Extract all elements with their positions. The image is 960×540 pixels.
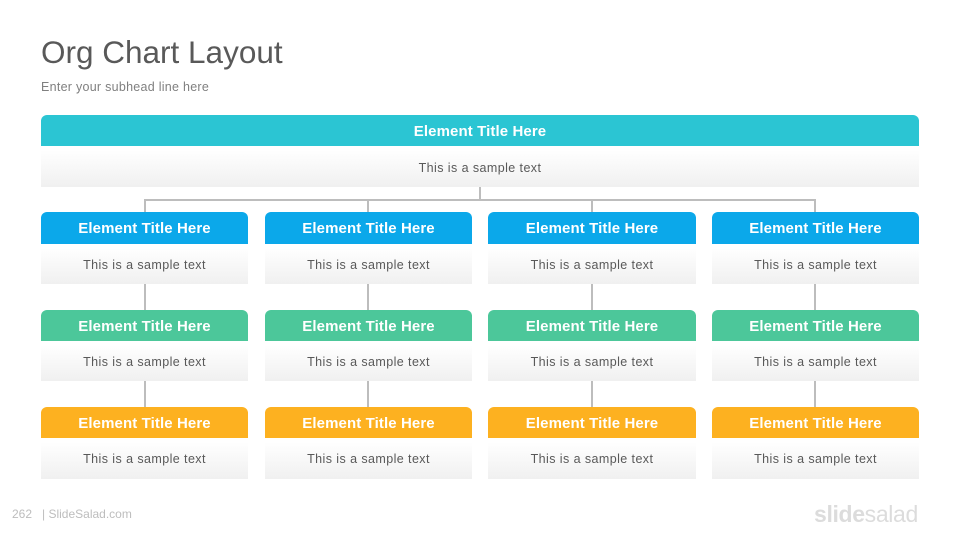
card: column 3 row 3: This is a sample text (531, 452, 653, 466)
card: column 1 row 1: This is a sample text (83, 258, 206, 272)
card: column 3 row 3: Element Title Here (526, 415, 658, 432)
card: column 4 row 1: This is a sample text (754, 258, 877, 272)
card: column 3 row 1: Element Title Here (526, 220, 658, 237)
card: column 2 row 1: This is a sample text (307, 258, 430, 272)
card: column 1 row 1: Element Title Here (78, 220, 211, 237)
card: column 1 row 1 (41, 212, 248, 284)
card: column 4 row 2: Element Title Here (749, 318, 882, 335)
card: column 2 row 2: Element Title Here (302, 318, 435, 335)
title: Org Chart Layout (41, 34, 283, 70)
logo wordmark: slidesalad (814, 501, 918, 527)
card: column 1 row 2 (41, 310, 248, 381)
card: column 4 row 3: Element Title Here (749, 415, 882, 432)
card: column 3 row 1 (488, 212, 696, 284)
footer page number: 262 | SlideSalad.com (12, 507, 132, 521)
card: column 2 row 1: Element Title Here (302, 220, 435, 237)
card: column 1 row 2: Element Title Here (78, 318, 211, 335)
subhead: Enter your subhead line here (41, 80, 209, 94)
card: column 4 row 1 (712, 212, 919, 284)
top element text (41, 146, 919, 187)
card: column 1 row 3: This is a sample text (83, 452, 206, 466)
card: column 1 row 3: Element Title Here (78, 415, 211, 432)
card: column 4 row 2 (712, 310, 919, 381)
card: column 2 row 2: This is a sample text (307, 355, 430, 369)
card: column 2 row 1 (265, 212, 472, 284)
top element title: Element Title Here (414, 123, 546, 140)
card: column 2 row 2 (265, 310, 472, 381)
card: column 4 row 3 (712, 407, 919, 479)
card: column 1 row 2: This is a sample text (83, 355, 206, 369)
card: column 2 row 3 (265, 407, 472, 479)
card: column 4 row 1: Element Title Here (749, 220, 882, 237)
top element panel (41, 115, 919, 187)
card: column 3 row 3 (488, 407, 696, 479)
card: column 4 row 3: This is a sample text (754, 452, 877, 466)
card: column 3 row 2: Element Title Here (526, 318, 658, 335)
top element title (41, 115, 919, 146)
top element text: This is a sample text (419, 161, 541, 175)
card: column 3 row 2: This is a sample text (531, 355, 653, 369)
card: column 1 row 3 (41, 407, 248, 479)
card: column 2 row 3: This is a sample text (307, 452, 430, 466)
card: column 4 row 2: This is a sample text (754, 355, 877, 369)
card: column 2 row 3: Element Title Here (302, 415, 435, 432)
card: column 3 row 2 (488, 310, 696, 381)
card: column 3 row 1: This is a sample text (531, 258, 653, 272)
